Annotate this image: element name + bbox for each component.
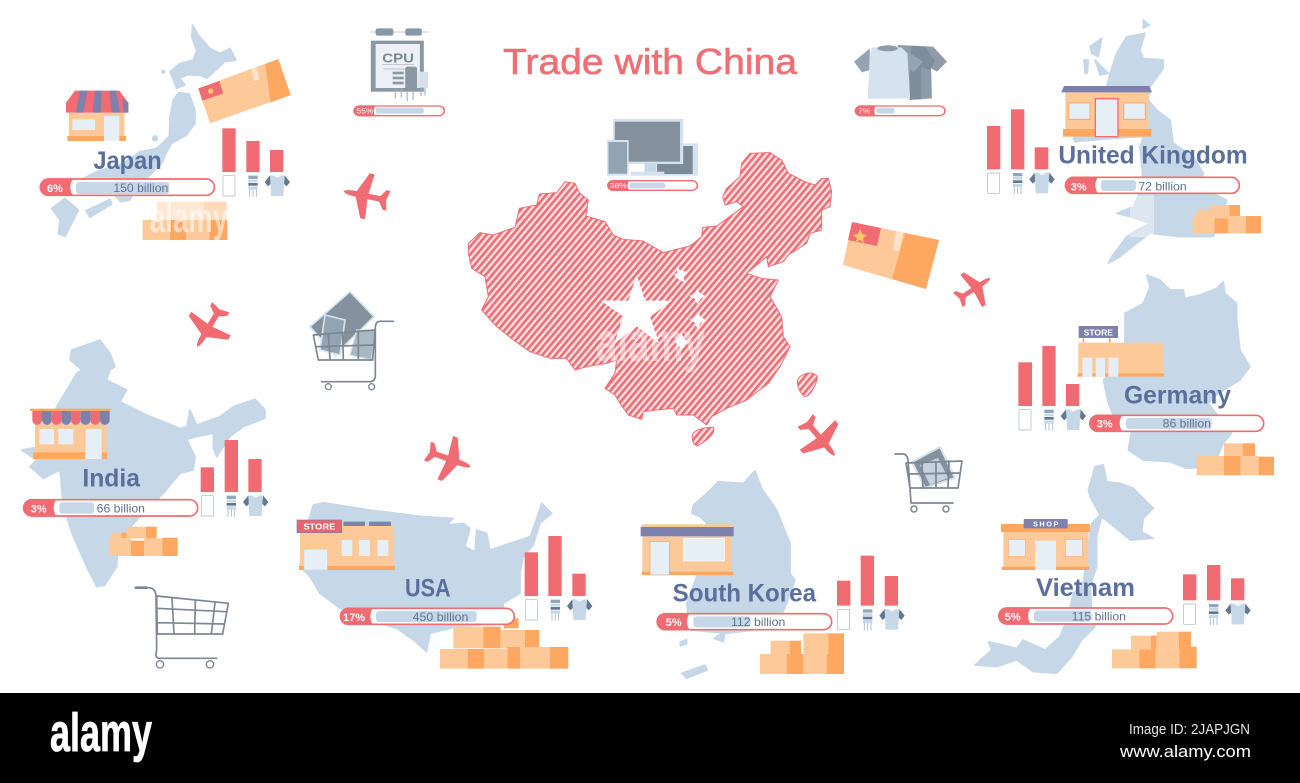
product: CPU with share bar xyxy=(353,28,444,116)
store: STORE xyxy=(303,521,336,531)
watermark over United Kingdom map xyxy=(1130,195,1154,237)
footer logo: alamy xyxy=(50,703,152,763)
share bar: 5% xyxy=(1005,612,1021,624)
parcel xyxy=(198,59,291,123)
share bar xyxy=(656,613,832,630)
map: China xyxy=(468,153,832,446)
empty shopping cart xyxy=(135,586,228,668)
share bar xyxy=(1089,415,1264,432)
plane 5 xyxy=(947,262,1001,316)
share bar: 3% xyxy=(1097,419,1113,431)
store xyxy=(66,91,128,141)
footer site: www.alamy.com xyxy=(1119,742,1251,761)
share bar: 17% xyxy=(343,612,365,624)
boxes xyxy=(1193,205,1261,233)
panel: South Korea xyxy=(641,471,905,678)
plane 1 xyxy=(339,169,393,223)
boxes xyxy=(143,202,227,240)
store xyxy=(1078,326,1164,377)
boxes xyxy=(109,527,178,556)
store xyxy=(297,520,395,570)
bar chart xyxy=(201,440,268,517)
store: STORE xyxy=(1084,327,1113,337)
share bar: 5% xyxy=(666,617,682,629)
share bar xyxy=(39,178,214,196)
country name: USA xyxy=(405,576,451,603)
share bar: 66 billion xyxy=(97,502,145,515)
icon: small flag stars xyxy=(673,267,707,350)
panel: United Kingdom xyxy=(987,20,1261,263)
map: South Korea xyxy=(680,471,795,678)
product: computer devices with share bar xyxy=(607,119,698,191)
share bar: 112 billion xyxy=(731,616,785,629)
bar chart xyxy=(1018,346,1086,431)
bar chart xyxy=(525,536,592,621)
country name: Japan xyxy=(93,148,162,175)
share bar: 55%: 55% xyxy=(357,107,373,115)
store xyxy=(1001,519,1090,570)
store xyxy=(641,524,734,575)
product: CPU with share bar: CPU xyxy=(382,51,414,65)
watermark over Japan boxes: alamy xyxy=(150,194,228,241)
store xyxy=(30,409,111,459)
share bar: 72 billion xyxy=(1138,180,1187,193)
parcel with Chinese flag xyxy=(843,222,939,289)
store: SHOP xyxy=(1033,519,1058,528)
country name: Germany xyxy=(1124,382,1231,409)
watermark over China map: alamy xyxy=(596,310,705,373)
plane 4 xyxy=(788,406,852,470)
icon: large flag star xyxy=(601,275,672,343)
country name: United Kingdom xyxy=(1058,142,1248,169)
boxes xyxy=(760,633,844,674)
panel: Germany xyxy=(1018,275,1274,475)
share bar: 150 billion xyxy=(113,182,168,195)
footer band xyxy=(0,693,1300,783)
plane 2 xyxy=(177,295,241,359)
shopping cart with CPU xyxy=(895,447,962,512)
map: Japan xyxy=(52,25,236,237)
boxes xyxy=(440,618,568,669)
map: United Kingdom xyxy=(1073,20,1227,263)
share bar xyxy=(998,607,1173,625)
bar chart xyxy=(222,128,290,197)
map: Germany xyxy=(1103,275,1250,468)
share bar: 3% xyxy=(1071,181,1087,193)
share bar: 86 billion xyxy=(1163,418,1211,431)
panel: Vietnam xyxy=(975,465,1251,673)
share bar xyxy=(340,608,514,625)
panel: Japan xyxy=(39,25,291,240)
shopping cart with devices xyxy=(310,292,393,390)
share bar: 3% xyxy=(31,503,47,515)
map: India xyxy=(22,340,265,587)
share bar xyxy=(1065,177,1239,194)
bar chart xyxy=(837,556,905,630)
map: Vietnam xyxy=(975,465,1153,673)
title: Trade with China xyxy=(503,41,798,82)
country name: South Korea xyxy=(673,581,816,608)
plane 3 xyxy=(420,430,478,488)
share bar: 115 billion xyxy=(1072,611,1126,624)
panel: USA xyxy=(297,503,592,669)
boxes xyxy=(1112,632,1197,668)
share bar: 7%: 7% xyxy=(858,107,870,115)
share bar xyxy=(23,499,198,517)
footer image id: Image ID: 2JAPJGN xyxy=(1129,721,1250,738)
bar chart xyxy=(1183,565,1251,625)
bar chart xyxy=(987,109,1055,194)
share bar: 6% xyxy=(47,183,63,195)
boxes xyxy=(1197,443,1274,475)
map: USA xyxy=(300,503,552,652)
store xyxy=(1061,86,1152,137)
share bar: 450 billion xyxy=(413,611,468,624)
product: T-shirts with share bar xyxy=(854,45,947,116)
country name: Vietnam xyxy=(1036,575,1135,602)
share bar: 38%: 38% xyxy=(610,182,627,190)
panel: India xyxy=(22,340,268,587)
country name: India xyxy=(82,466,140,493)
